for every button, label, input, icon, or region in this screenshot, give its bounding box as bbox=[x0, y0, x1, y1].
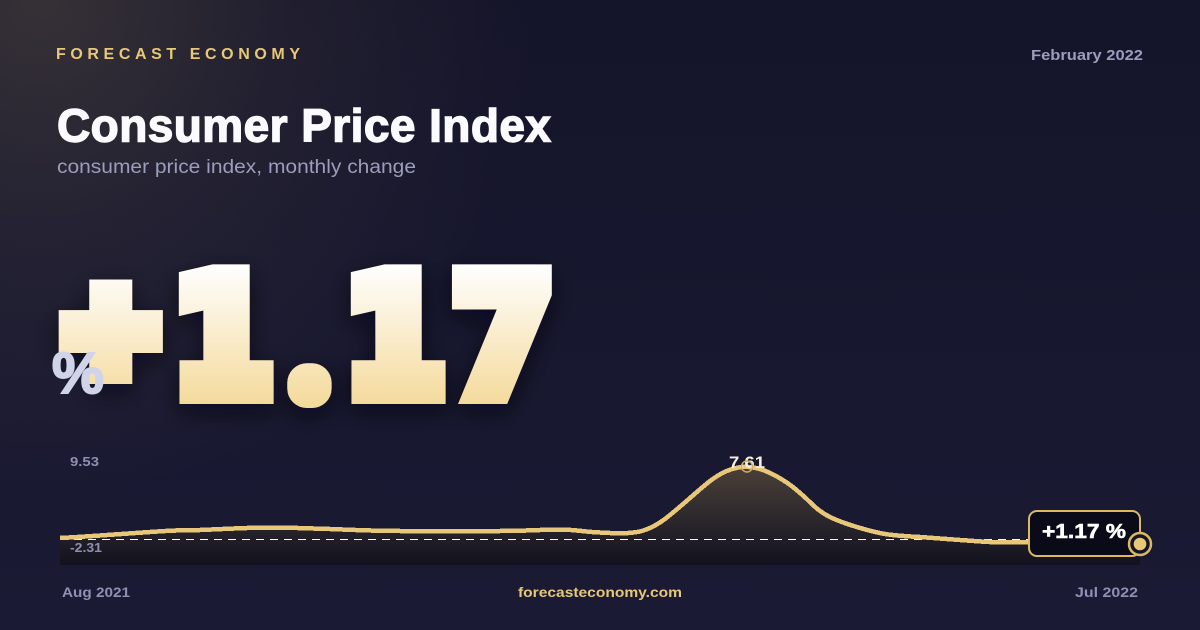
big value: 7 bbox=[453, 244, 553, 430]
peak label: 7.61 bbox=[729, 453, 765, 472]
sparkline chart bbox=[60, 453, 1140, 565]
current value marker bbox=[1129, 533, 1151, 555]
baseline bbox=[60, 538, 1140, 540]
title: Consumer Price Index bbox=[57, 100, 551, 152]
current value callout: +1.17 % bbox=[1042, 521, 1126, 543]
brand label: FORECAST ECONOMY bbox=[56, 46, 300, 63]
big value bbox=[60, 244, 553, 430]
peak marker bbox=[742, 461, 752, 472]
y max label: 9.53 bbox=[70, 454, 99, 469]
date: February 2022 bbox=[1031, 47, 1143, 64]
x axis start label: Aug 2021 bbox=[62, 584, 130, 600]
subtitle: consumer price index, monthly change bbox=[57, 157, 416, 178]
chart area fill bbox=[60, 467, 1140, 565]
y min label: -2.31 bbox=[70, 540, 102, 555]
big value: + bbox=[60, 260, 161, 398]
source website: forecasteconomy.com bbox=[518, 584, 682, 600]
current value callout bbox=[1029, 511, 1140, 556]
line series bbox=[60, 467, 1030, 542]
big value: . bbox=[304, 362, 315, 396]
x axis end label: Jul 2022 bbox=[1075, 584, 1138, 600]
big value: 1 bbox=[173, 244, 273, 430]
big value: 1 bbox=[345, 244, 445, 430]
percent sign: % bbox=[52, 341, 104, 406]
